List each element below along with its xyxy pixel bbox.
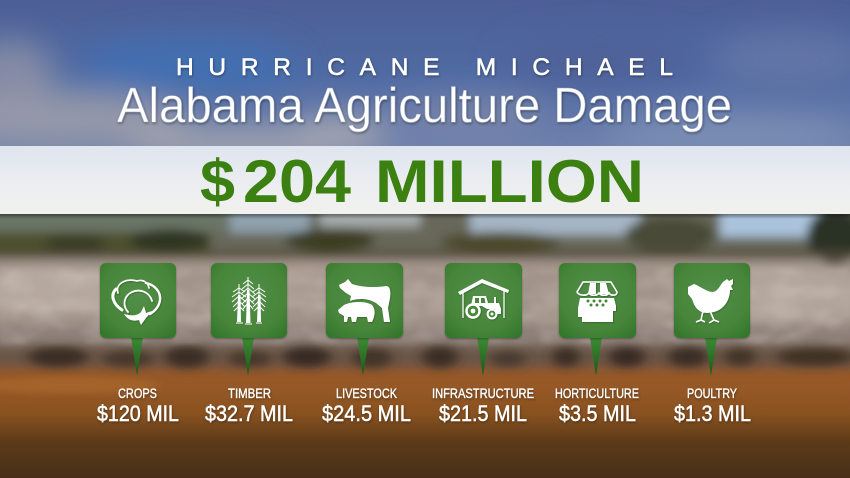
title block bbox=[117, 54, 732, 133]
icon: barn and tractor bbox=[458, 279, 509, 318]
icon: cotton boll bbox=[113, 280, 160, 325]
category: infrastructure bbox=[432, 263, 534, 426]
icon: cow and pig bbox=[338, 279, 390, 322]
title: Alabama Agriculture Damage: Alabama Agriculture Damage bbox=[117, 79, 732, 133]
pin pointer bbox=[131, 337, 143, 376]
value: $3.5 MIL bbox=[559, 401, 636, 426]
pin pointer bbox=[477, 337, 489, 376]
title: Hurricane Michael: HURRICANE MICHAEL bbox=[176, 54, 673, 81]
total damage figure bbox=[200, 148, 644, 215]
label: INFRASTRUCTURE bbox=[432, 385, 534, 401]
total damage figure: $ bbox=[200, 148, 235, 215]
value: $120 MIL bbox=[97, 401, 179, 426]
total damage figure: MILLION bbox=[375, 148, 644, 215]
total damage banner bbox=[0, 146, 850, 215]
category: timber bbox=[205, 263, 293, 426]
pin badge bbox=[211, 263, 287, 338]
label: HORTICULTURE bbox=[555, 385, 639, 401]
value: $32.7 MIL bbox=[205, 401, 293, 426]
pin pointer bbox=[242, 337, 254, 376]
pin badge bbox=[674, 263, 750, 338]
pin badge bbox=[559, 263, 636, 338]
pin badge bbox=[326, 263, 403, 338]
icon: trees bbox=[232, 277, 266, 324]
total damage figure: 204 bbox=[243, 148, 352, 215]
label: CROPS bbox=[118, 385, 157, 401]
icon: market stall bbox=[577, 282, 617, 322]
category: poultry bbox=[674, 263, 751, 426]
pin badge bbox=[445, 263, 522, 338]
category: horticulture bbox=[555, 263, 639, 426]
category: livestock bbox=[322, 263, 411, 426]
category: crops bbox=[97, 263, 179, 426]
pin pointer bbox=[590, 337, 602, 376]
value: $24.5 MIL bbox=[322, 401, 411, 426]
label: POULTRY bbox=[687, 385, 738, 401]
value: $1.3 MIL bbox=[674, 401, 751, 426]
value: $21.5 MIL bbox=[439, 401, 527, 426]
pin pointer bbox=[705, 337, 717, 376]
label: TIMBER bbox=[228, 385, 271, 401]
icon: chicken bbox=[688, 279, 733, 323]
pin pointer bbox=[357, 337, 369, 376]
label: LIVESTOCK bbox=[336, 385, 398, 401]
pin badge bbox=[100, 263, 176, 338]
